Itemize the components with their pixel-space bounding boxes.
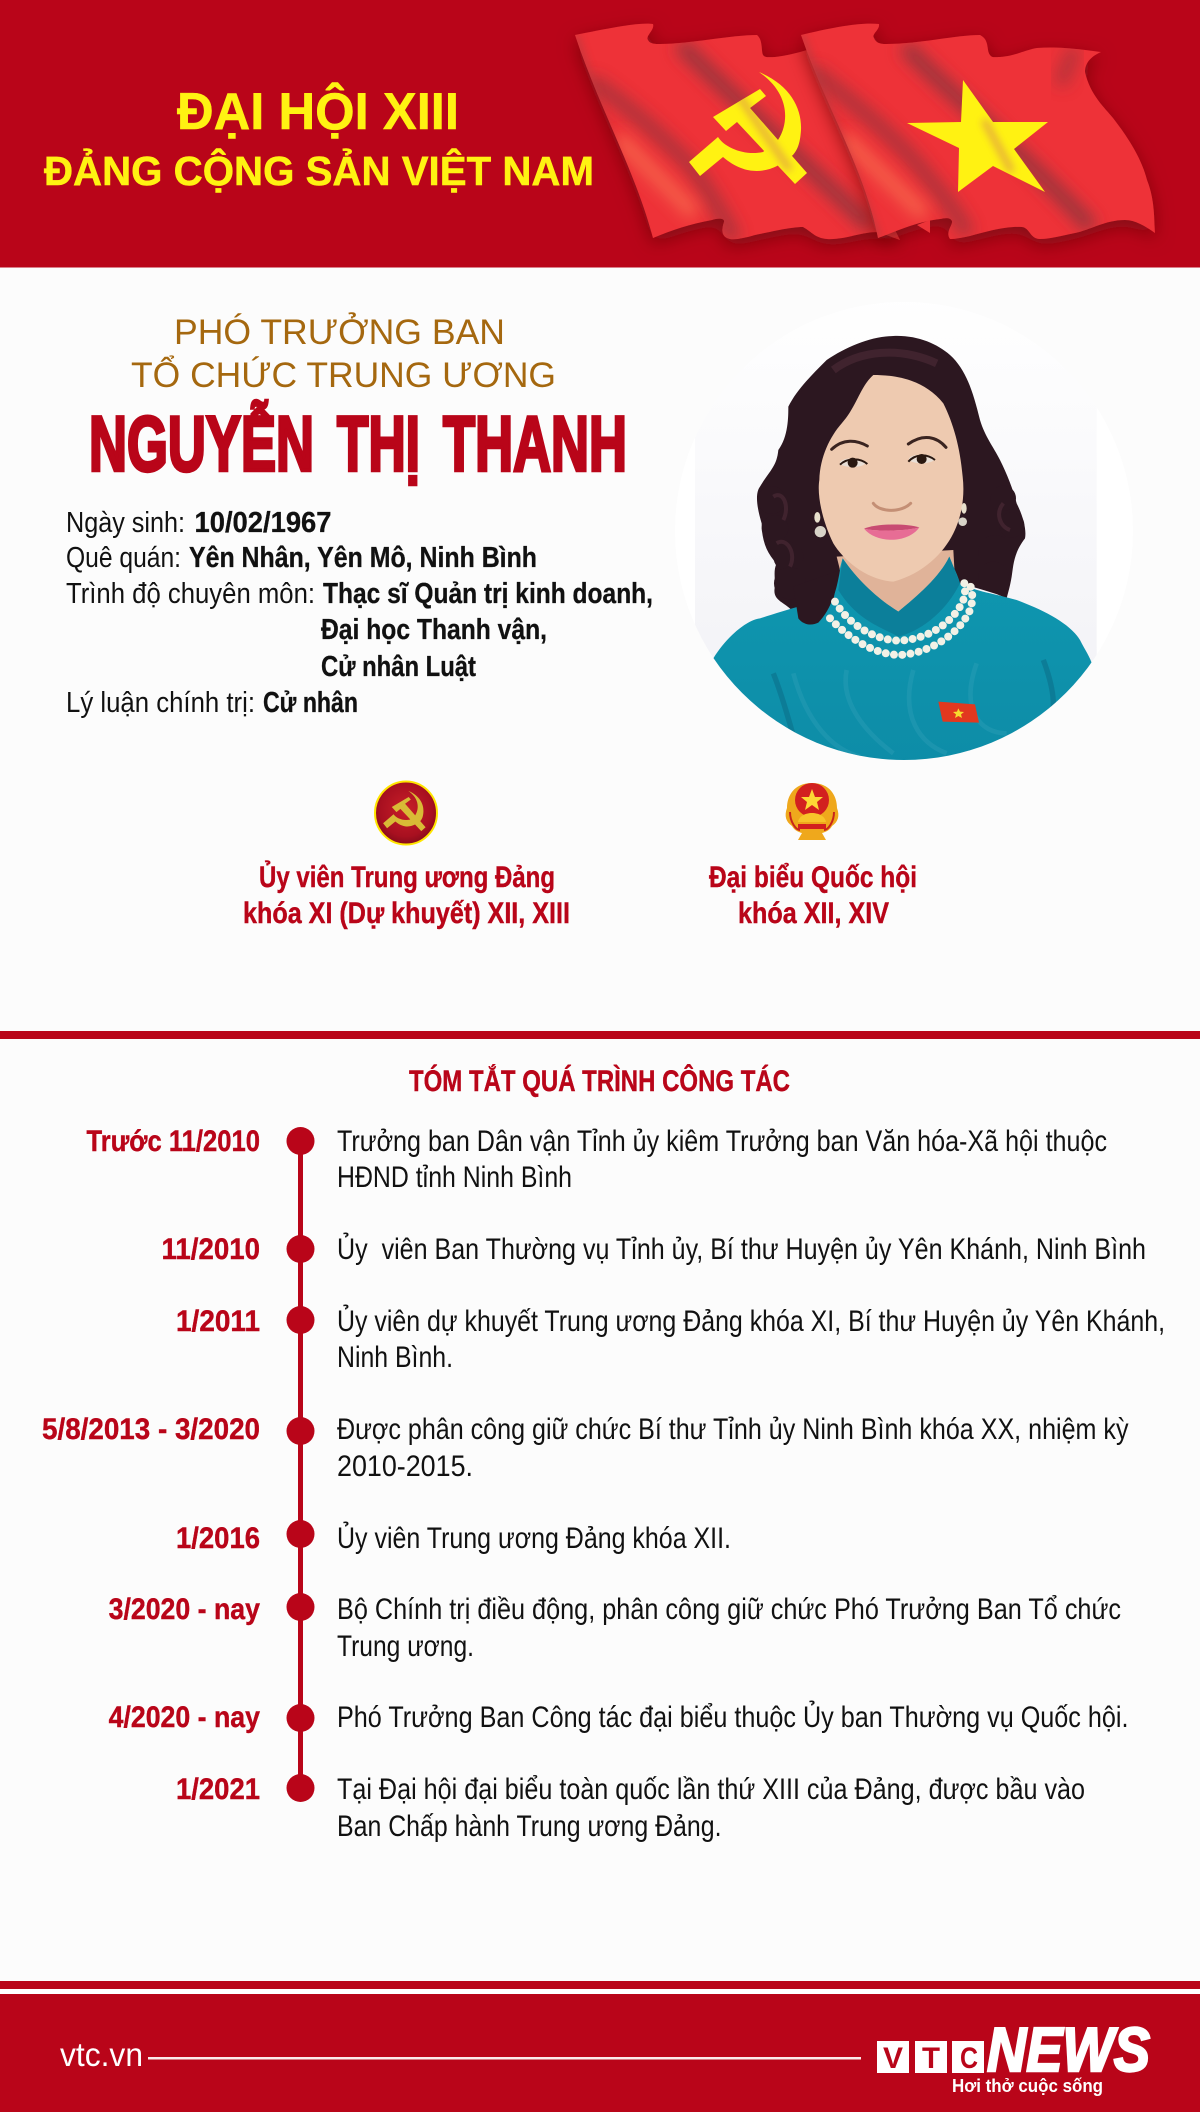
logo: VTC News: [877, 2016, 1150, 2096]
header title: ĐẠI HỘI XIII: [177, 82, 459, 141]
text block: personal details: Trình độ chuyên môn:: [66, 578, 315, 610]
text block: personal details: [66, 507, 653, 719]
text: National Assembly membership: Đại biểu Quốc hội: [709, 861, 917, 894]
text block: personal details: Cử nhân Luật: [321, 651, 476, 683]
text block: personal details: 10/02/1967: [194, 507, 332, 539]
header title: ĐẢNG CỘNG SẢN VIỆT NAM: [44, 148, 594, 194]
timeline entry: 5/8/2013 - 3/2020: [42, 1413, 1128, 1483]
heading: position title: [131, 312, 556, 395]
timeline entry: 11/2010: 11/2010: [162, 1233, 260, 1266]
logo: VTC News: C: [960, 2042, 978, 2075]
timeline entry: 1/2011: Ninh Bình.: [337, 1341, 453, 1374]
icon: star: [907, 80, 1048, 192]
timeline entry: 5/8/2013 - 3/2020: 5/8/2013 - 3/2020: [42, 1413, 260, 1446]
footer band: [0, 1994, 1200, 2112]
timeline entry: 1/2021: Ban Chấp hành Trung ương Đảng.: [337, 1810, 722, 1843]
timeline entry: 4/2020 - now: 4/2020 - nay: [109, 1701, 260, 1734]
timeline entry: 1/2021: [176, 1773, 1085, 1843]
footer site address: vtc.vn: [60, 2036, 143, 2073]
national flag with star: [795, 18, 1160, 242]
text: party committee membership: Ủy viên Trung ương Đảng: [259, 860, 555, 894]
text block: personal details: Ngày sinh:: [66, 507, 185, 539]
icon: national emblem: [786, 783, 838, 840]
text: National Assembly membership: khóa XII, XIV: [738, 897, 889, 930]
icon: hammer and sickle: [689, 72, 807, 184]
party flag with hammer and sickle: [570, 20, 910, 242]
text: National Assembly membership: [709, 861, 917, 930]
timeline entry: 1/2016: Ủy viên Trung ương Đảng khóa XII.: [337, 1521, 731, 1555]
timeline entry: 3/2020 - now: Trung ương.: [337, 1630, 474, 1663]
logo: VTC News: T: [922, 2042, 940, 2075]
timeline entry: 1/2016: 1/2016: [176, 1522, 260, 1555]
timeline entry: 5/8/2013 - 3/2020: 2010-2015.: [337, 1450, 473, 1483]
text block: personal details: Lý luận chính trị:: [66, 687, 255, 719]
timeline entry: before 11/2010: HĐND tỉnh Ninh Bình: [337, 1161, 572, 1194]
header banner: [0, 0, 1200, 268]
text: party committee membership: khóa XI (Dự khuyết) XII, XIII: [243, 897, 570, 930]
heading: position title: TỔ CHỨC TRUNG ƯƠNG: [131, 355, 556, 395]
heading: name: THỊ: [337, 400, 420, 488]
heading: career summary: TÓM TẮT QUÁ TRÌNH CÔNG TÁC: [409, 1064, 790, 1098]
logo: VTC News: Hơi thở cuộc sống: [952, 2076, 1103, 2096]
text block: personal details: Yên Nhân, Yên Mô, Ninh Bình: [189, 542, 537, 574]
text: party committee membership: [243, 860, 570, 930]
heading: name: [89, 400, 627, 488]
portrait photo: [707, 336, 1096, 760]
heading: position title: PHÓ TRƯỞNG BAN: [174, 312, 505, 352]
icon: party emblem: [375, 782, 437, 844]
timeline entry: 1/2011: 1/2011: [176, 1305, 260, 1338]
timeline entry: before 11/2010: [86, 1125, 1107, 1194]
heading: name: THANH: [443, 400, 627, 488]
timeline entry: 1/2021: 1/2021: [176, 1773, 260, 1806]
logo: VTC News: NEWS: [987, 2016, 1150, 2085]
timeline entry: 3/2020 - now: [109, 1593, 1121, 1663]
timeline entry: 1/2011: [176, 1304, 1165, 1374]
timeline entry: 3/2020 - now: 3/2020 - nay: [109, 1593, 260, 1626]
logo: VTC News: V: [883, 2042, 903, 2075]
timeline: [42, 1125, 1165, 1843]
text block: personal details: Thạc sĩ Quản trị kinh doanh,: [323, 578, 653, 610]
timeline entry: 1/2016: [176, 1520, 731, 1555]
timeline entry: before 11/2010: Trước 11/2010: [86, 1125, 260, 1158]
text block: personal details: Đại học Thanh vận,: [321, 614, 547, 646]
header title: [44, 82, 594, 194]
heading: name: NGUYỄN: [89, 400, 314, 488]
text block: personal details: Cử nhân: [263, 687, 358, 719]
text block: personal details: Quê quán:: [66, 542, 181, 574]
